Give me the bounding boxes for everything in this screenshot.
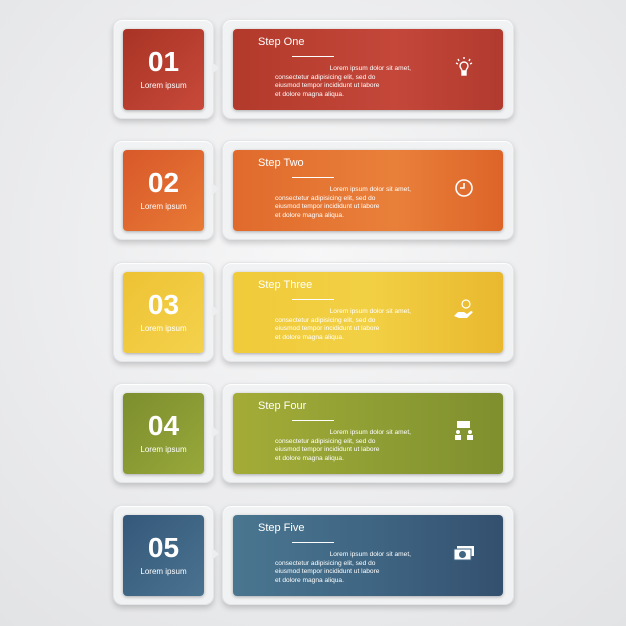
number box 04: Lorem ipsum: [140, 445, 187, 454]
panel: step two: Lorem ipsum dolor sit amet,: [330, 186, 411, 193]
panel: step two: [233, 150, 503, 231]
panel: step four: et dolore magna aliqua.: [275, 455, 344, 462]
panel: step two: Step Two: [258, 157, 304, 169]
panel: step three: eiusmod tempor incididunt ut labore: [275, 325, 379, 332]
number box 05: Lorem ipsum: [140, 567, 187, 576]
icon: light bulb: [456, 57, 472, 76]
number box 02: 02: [148, 167, 179, 198]
panel: step three: et dolore magna aliqua.: [275, 334, 344, 341]
panel: step four: Step Four: [258, 400, 306, 412]
panel: step four: [233, 393, 503, 474]
icon: two people talking: [455, 421, 473, 440]
panel: step one: et dolore magna aliqua.: [275, 91, 344, 98]
panel: step three: Step Three: [258, 279, 312, 291]
icon: hand with coin: [454, 299, 473, 318]
panel: step five: et dolore magna aliqua.: [275, 577, 344, 584]
number box 03: Lorem ipsum: [140, 324, 187, 333]
number box 05: 05: [148, 532, 179, 563]
panel: step three: Lorem ipsum dolor sit amet,: [330, 308, 411, 315]
number box 01: [123, 29, 204, 110]
panel: step one: eiusmod tempor incididunt ut labore: [275, 82, 379, 89]
panel: step three: consectetur adipisicing elit, sed do: [275, 317, 375, 324]
number box 03: [123, 272, 204, 353]
number box 04: 04: [148, 410, 179, 441]
row 3: [110, 262, 516, 368]
panel: step one: consectetur adipisicing elit, sed do: [275, 74, 375, 81]
row 4: [110, 383, 516, 488]
icon: money: [454, 546, 474, 560]
number box 04: [123, 393, 204, 474]
panel: step five: Step Five: [258, 522, 304, 534]
number box 05: [123, 515, 204, 596]
number box 02: Lorem ipsum: [140, 202, 187, 211]
row 1: [110, 19, 516, 124]
panel: step one: Step One: [258, 36, 304, 48]
number box 01: 01: [148, 46, 179, 77]
number box 03: 03: [148, 289, 179, 320]
panel: step five: consectetur adipisicing elit, sed do: [275, 560, 375, 567]
icon: clock: [455, 179, 473, 197]
panel: step four: consectetur adipisicing elit, sed do: [275, 438, 375, 445]
panel: step one: Lorem ipsum dolor sit amet,: [330, 65, 411, 72]
row 2: [110, 140, 516, 246]
number box 01: Lorem ipsum: [140, 81, 187, 90]
number box 02: [123, 150, 204, 231]
panel: step two: et dolore magna aliqua.: [275, 212, 344, 219]
panel: step two: eiusmod tempor incididunt ut labore: [275, 203, 379, 210]
panel: step three: [233, 272, 503, 353]
panel: step four: eiusmod tempor incididunt ut labore: [275, 446, 379, 453]
panel: step five: Lorem ipsum dolor sit amet,: [330, 551, 411, 558]
panel: step four: Lorem ipsum dolor sit amet,: [330, 429, 411, 436]
row 5: [110, 505, 516, 610]
panel: step five: [233, 515, 503, 596]
panel: step two: consectetur adipisicing elit, sed do: [275, 195, 375, 202]
panel: step one: [233, 29, 503, 110]
panel: step five: eiusmod tempor incididunt ut labore: [275, 568, 379, 575]
